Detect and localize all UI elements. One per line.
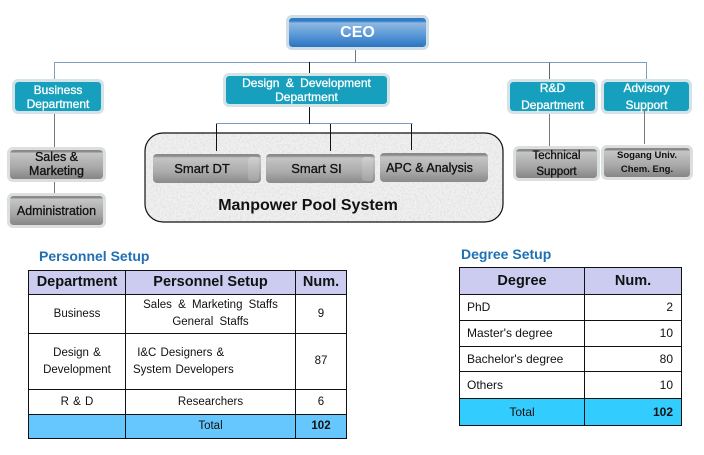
table: personnel setup: 87 <box>315 355 327 367</box>
connector lines <box>54 50 647 193</box>
smart SI <box>266 154 375 183</box>
smart DT: Smart DT <box>174 160 230 176</box>
administration <box>7 193 106 228</box>
table: personnel setup: Development <box>43 364 111 376</box>
business department: Department <box>27 96 89 110</box>
CEO box <box>286 15 429 50</box>
R&D department: R&D <box>540 81 565 95</box>
table: personnel setup: I&C Designers & <box>137 346 224 358</box>
sogang university chemical engineering <box>601 145 693 180</box>
table: personnel setup: System Developers <box>133 364 234 376</box>
technical support: Technical <box>533 150 580 162</box>
smart SI: Smart SI <box>291 160 342 176</box>
smart DT <box>153 154 261 183</box>
business department: Business <box>34 82 82 96</box>
table: personnel setup: 6 <box>318 396 324 408</box>
heading: personnel setup: Personnel Setup <box>39 248 149 264</box>
heading: degree setup: Degree Setup <box>461 246 551 262</box>
table: degree setup: Num. <box>615 272 651 288</box>
table: personnel setup: Researchers <box>178 396 243 408</box>
sogang university chemical engineering: Sogang Univ. <box>617 150 677 160</box>
advisory support: Support <box>625 98 668 112</box>
table: degree setup: 2 <box>666 300 673 314</box>
APC and analysis: APC & Analysis <box>386 160 473 174</box>
table: personnel setup <box>28 270 347 439</box>
table: personnel setup: 102 <box>311 420 331 432</box>
APC and analysis <box>380 153 488 182</box>
table: degree setup <box>459 267 682 426</box>
table: degree setup: PhD <box>467 300 490 314</box>
technical support: Support <box>536 166 577 178</box>
table: personnel setup: R & D <box>61 396 93 408</box>
sales and marketing: Sales & <box>35 150 78 164</box>
CEO box: CEO <box>340 24 375 40</box>
table: degree setup: 80 <box>660 352 673 366</box>
table: degree setup: Master's degree <box>467 326 553 340</box>
advisory connector <box>644 110 645 144</box>
sales and marketing <box>7 147 106 182</box>
advisory support: Advisory <box>623 81 670 95</box>
technical support <box>513 146 600 181</box>
advisory support <box>601 79 692 114</box>
design and development department: Department <box>275 90 338 104</box>
table: degree setup: 10 <box>660 378 673 392</box>
table: personnel setup: Total <box>198 420 223 432</box>
table: degree setup: Bachelor's degree <box>467 352 563 366</box>
sales and marketing: Marketing <box>29 164 84 178</box>
table: personnel setup: General Staffs <box>172 316 249 328</box>
administration: Administration <box>17 204 96 218</box>
business department <box>12 79 104 114</box>
manpower pool system label: Manpower Pool System <box>218 197 398 214</box>
org chart <box>7 15 693 228</box>
panel: manpower pool system <box>144 132 504 223</box>
R&D department: Department <box>521 98 584 112</box>
design and development department: Design & Development <box>242 76 371 90</box>
table: personnel setup: Personnel Setup <box>153 274 268 290</box>
table: degree setup: 102 <box>653 404 673 418</box>
table: degree setup: Total <box>509 404 535 418</box>
table: personnel setup: Department <box>37 274 117 290</box>
sogang university chemical engineering: Chem. Eng. <box>621 164 673 174</box>
table: degree setup: 10 <box>660 326 673 340</box>
table: personnel setup: Business <box>54 308 100 320</box>
R&D department <box>507 79 598 114</box>
table: personnel setup: Design & <box>53 346 101 358</box>
table: degree setup: Degree <box>497 272 547 288</box>
table: personnel setup: Sales & Marketing Staffs <box>143 299 278 311</box>
table: personnel setup: Num. <box>303 274 339 290</box>
design and development department <box>223 73 390 107</box>
table: degree setup: Others <box>467 378 503 392</box>
table: personnel setup: 9 <box>318 308 324 320</box>
